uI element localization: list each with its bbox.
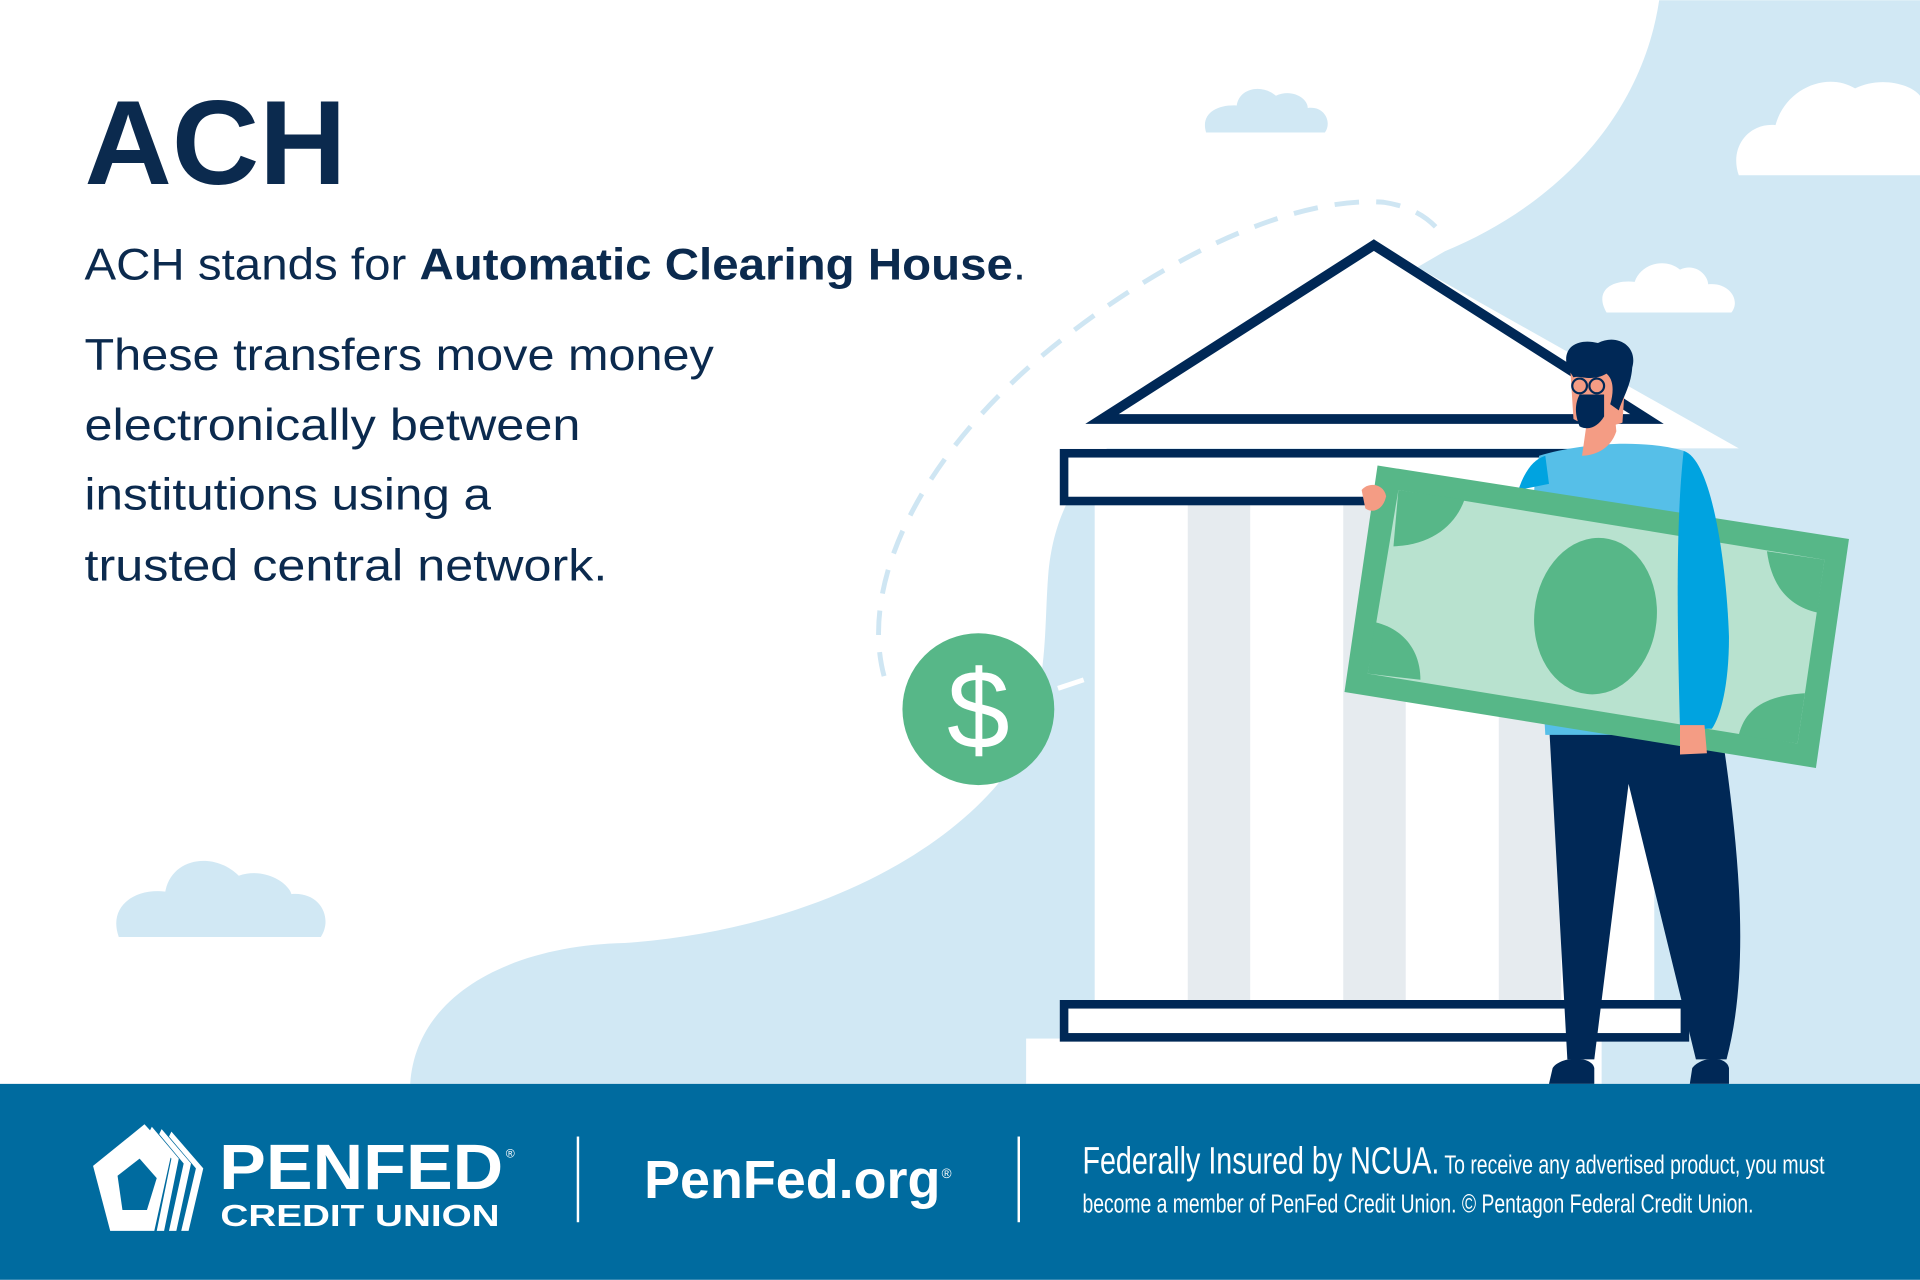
description: institutions using a [84, 471, 492, 520]
disclaimer [1082, 1140, 1824, 1218]
title: ACH [84, 76, 347, 210]
cloud: top middle [1205, 89, 1328, 132]
cloud: bottom left [116, 861, 326, 937]
dashed transfer arc [879, 202, 1439, 676]
dollar bill [1344, 466, 1849, 768]
logo text: PENFED [219, 1132, 503, 1203]
description: These transfers move money [84, 331, 714, 380]
dollar coin [902, 633, 1054, 785]
arms and hands [1362, 451, 1729, 754]
definition line: ACH stands for Automatic Clearing House . [84, 240, 1026, 289]
website: ® [942, 1166, 952, 1181]
background blob [410, 0, 1920, 1084]
description: electronically between [84, 401, 580, 450]
dollar coin: $ [947, 646, 1010, 772]
bank building [1026, 243, 1739, 1084]
logo text [219, 1132, 515, 1233]
description: trusted central network. [84, 542, 607, 591]
man [1518, 340, 1740, 1084]
logo text: ® [506, 1146, 515, 1160]
footer [0, 1084, 1920, 1280]
cloud: top right [1736, 82, 1920, 175]
logo icon [93, 1124, 203, 1231]
logo text: CREDIT UNION [220, 1199, 500, 1233]
website: PenFed.org [644, 1150, 940, 1210]
cloud: right middle [1602, 263, 1735, 312]
description [84, 331, 714, 591]
